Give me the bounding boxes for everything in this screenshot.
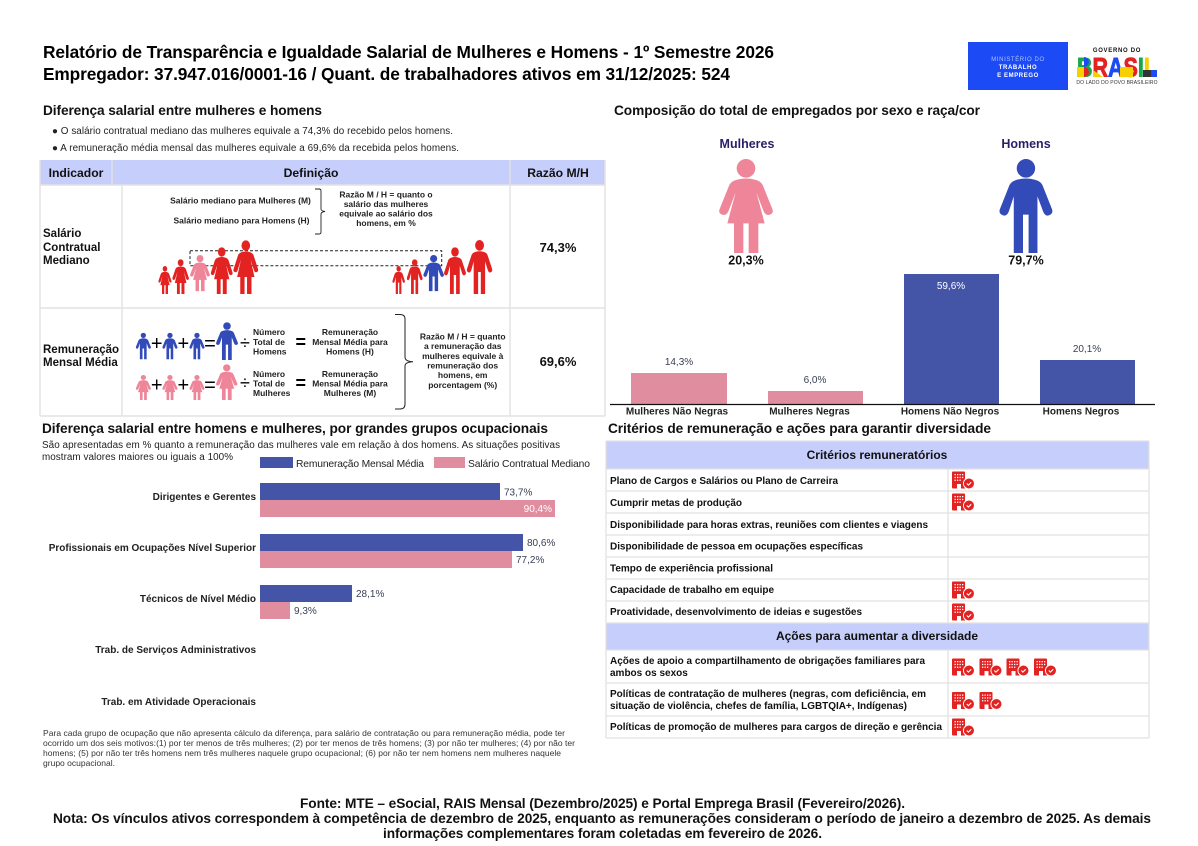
ratio: 69,6%: 69,6% [540,354,577,369]
logo: Ministério do Trabalho e Emprego [968,42,1068,90]
panel: occupational groups [42,421,590,768]
definition: average pay ratio: homens, em [438,370,488,380]
definition: median salary labels: salário das mulheres [344,199,429,209]
row label: Salário Contratual Mediano: Salário [43,228,81,240]
heading: occupational groups: Diferença salarial entre homens e mulheres, por grandes grupos ocupacionais [42,421,548,436]
chart: Técnicos [140,585,384,619]
criteria rows: Capacidade de trabalho em equipe [610,585,774,596]
footnote: Para cada grupo de ocupação que não apresenta cálculo da diferença, para salário de contratação ou para remuneração média, pode ter [43,728,565,738]
criteria rows: Cumprir metas de produção [610,498,742,509]
formula: men average: Homens [253,346,287,356]
bar chart: sex and race: 59,6% [937,281,965,292]
chart: Técnicos: 28,1% [356,589,384,600]
formula: women average: Mensal Média para [312,378,388,388]
criteria table [606,441,1149,738]
chart: Dirigentes e Gerentes [153,483,555,517]
definition: median salary labels: Salário mediano para Homens (H) [173,216,310,226]
footnote: homens; (5) por não ter três homens nem três mulheres naquele grupo ocupacional; (6) por não ter nem homens nem mulheres naquele [43,748,561,758]
formula: men average: = [204,333,216,355]
chart: Profissionais: 80,6% [527,538,555,549]
formula: men average: Remuneração [322,327,378,337]
indicator table [40,160,605,416]
dashed median connector [190,251,442,266]
action icons [952,658,1057,736]
logo: Ministério do Trabalho e Emprego: TRABALHO [999,65,1037,71]
formula: women average: Número [253,369,285,379]
criteria rows: Disponibilidade para horas extras, reuniões com clientes e viagens [610,520,928,531]
chart: Técnicos: Técnicos de Nível Médio [140,594,256,605]
subtitle [42,440,560,463]
criteria rows: Proatividade, desenvolvimento de ideias e sugestões [610,607,862,618]
criteria icons [952,472,975,621]
bar chart: sex and race: Homens Não Negros [901,406,1000,418]
bullet texts [52,126,459,154]
legend [260,457,590,470]
chart: Profissionais: Profissionais em Ocupações Nível Superior [49,543,256,554]
table header: Razão M/H [527,166,589,180]
row label: Salário Contratual Mediano: Mediano [43,255,90,267]
heading: salary difference: Diferença salarial entre mulheres e homens [43,103,322,118]
bar chart: sex and race: 6,0% [804,375,827,386]
row label: Remuneração Mensal Média: Remuneração [43,344,119,356]
bar chart: sex and race: Homens Negros [1043,406,1120,418]
bar chart: sex and race: 20,1% [1073,344,1101,355]
icon: women 20,3% [719,137,774,268]
action rows: Ações de apoio a compartilhamento de obrigações familiares para [610,656,925,667]
action rows: Políticas de promoção de mulheres para cargos de direção e gerência [610,722,942,733]
bullet texts: ● A remuneração média mensal das mulheres equivale a 69,6% da recebida pelos homens. [52,143,459,154]
formula: men average [136,322,388,360]
formula: men average: + [177,333,189,355]
chart: Dirigentes e Gerentes: 90,4% [524,504,552,515]
action rows [610,656,942,733]
legend: Salário Contratual Mediano [468,459,590,470]
formula: women average: Total de [253,378,285,388]
panel: workforce composition [610,103,1155,418]
formula: women average: = [295,373,306,393]
row label: Salário Contratual Mediano: Contratual [43,242,100,254]
icon: women 20,3%: Mulheres [720,137,774,151]
heading: composition: Composição do total de empregados por sexo e raça/cor [614,103,981,118]
table section: Ações para aumentar a diversidade: Ações para aumentar a diversidade [776,629,978,643]
formula: men average: ÷ [240,333,250,353]
action rows: situação de violência, chefes de família, LGBTQIA+, Indígenas) [610,701,907,712]
definition: average pay ratio: Razão M / H = quanto [420,332,506,342]
criteria rows: Plano de Cargos e Salários ou Plano de Carreira [610,476,838,487]
chart: empty categories: Trab. em Atividade Operacionais [101,697,256,708]
bar chart: sex and race: 14,3% [665,357,693,368]
definition: median salary labels: Salário mediano para Mulheres (M) [170,196,311,206]
definition: average pay ratio [395,314,506,409]
formula: men average: Homens (H) [326,346,374,356]
logo: Governo do Brasil: GOVERNO DO [1093,48,1141,54]
formula: men average: Número [253,327,285,337]
bar chart: sex and race: Mulheres Negras [769,406,850,418]
icon: men 79,7%: 79,7% [1008,254,1044,268]
footnote: ocorrido um dos seis motivos:(1) por ter menos de três mulheres; (2) por ter menos de três homens; (3) por não ter mulheres; (4) por não ter [43,738,575,748]
footer note: Fonte: MTE – eSocial, RAIS Mensal (Dezembro/2025) e Portal Emprega Brasil (Fevereiro/2026). [300,796,905,811]
formula: women average [136,364,388,400]
logo: Ministério do Trabalho e Emprego: E EMPREGO [997,73,1039,79]
action rows: ambos os sexos [610,668,688,679]
criteria rows [610,476,928,618]
legend: Remuneração Mensal Média [296,459,424,470]
chart: Profissionais: 77,2% [516,555,544,566]
formula: women average: Mulheres (M) [324,388,376,398]
chart: Dirigentes e Gerentes: 73,7% [504,488,532,498]
footer note: Nota: Os vínculos ativos correspondem à competência de dezembro de 2025, enquanto as remunerações consideram o período de janeiro a dezembro de 2025. As demais [53,811,1151,826]
icon: women 20,3%: 20,3% [728,254,764,268]
bar chart: sex and race [610,274,1155,418]
footer note: informações complementares foram coletadas em fevereiro de 2026. [383,826,822,841]
definition: median salary labels: equivale ao salário dos [339,208,433,218]
table header: Definição [284,166,338,180]
definition: median salary labels [170,189,433,234]
formula: women average: Remuneração [322,369,378,379]
row label: Remuneração Mensal Média: Mensal Média [43,357,118,369]
title: Empregador: 37.947.016/0001-16 / Quant. de trabalhadores ativos em 31/12/2025: 524 [43,64,730,84]
panel: criteria and actions [606,421,1149,738]
definition: average pay ratio: remuneração dos [427,360,498,370]
panel: salary difference [40,103,605,416]
formula: women average: + [177,374,189,396]
chart: Dirigentes e Gerentes: Dirigentes e Gerentes [153,492,256,503]
logo: Governo do Brasil: BRASIL [1077,52,1157,82]
formula: women average: = [204,374,216,396]
formula: women average: Mulheres [253,388,291,398]
definition: median salary labels: homens, em % [356,218,416,228]
chart: empty categories [95,645,256,708]
logo: Ministério do Trabalho e Emprego: MINISTÉRIO DO [991,56,1045,63]
table header: Indicador [49,166,104,180]
definition: average pay ratio: mulheres equivale à [422,351,504,361]
title [43,42,774,84]
criteria rows: Disponibilidade de pessoa em ocupações específicas [610,542,863,552]
formula: men average: Total de [253,337,285,347]
footnote [43,728,575,768]
formula: men average: + [151,333,163,355]
chart: empty categories: Trab. de Serviços Administrativos [95,645,256,656]
row label: Remuneração Mensal Média [43,344,119,369]
definition: average pay ratio: porcentagem (%) [428,380,497,390]
formula: women average: ÷ [240,373,250,393]
table section: Critérios remuneratórios: Critérios remuneratórios [807,448,948,462]
action rows: Políticas de contratação de mulheres (negras, com deficiência, em [610,689,926,700]
icons: women line [158,240,258,294]
logo: Governo do Brasil: DO LADO DO POVO BRASILEIRO [1076,80,1158,86]
table header [49,166,589,180]
bar chart: sex and race: Mulheres Não Negras [626,406,729,418]
formula: men average: = [295,332,306,352]
title: Relatório de Transparência e Igualdade Salarial de Mulheres e Homens - 1º Semestre 2026 [43,42,774,62]
subtitle: São apresentadas em % quanto a remuneração das mulheres vale em relação à dos homens. As situações positivas [42,440,560,451]
definition: median salary labels: Razão M / H = quanto o [339,190,433,200]
criteria rows: Tempo de experiência profissional [610,564,773,574]
chart: Profissionais [49,534,555,568]
definition: average pay ratio: a remuneração das [424,341,502,351]
subtitle: mostram valores maiores ou iguais a 100% [42,452,233,463]
formula: women average: + [151,374,163,396]
footnote: grupo ocupacional. [43,758,115,768]
formula: men average: Mensal Média para [312,337,388,347]
heading: criteria: Critérios de remuneração e ações para garantir diversidade [608,421,991,436]
footer note [53,796,1151,841]
icon: men 79,7% [999,137,1052,268]
bullet texts: ● O salário contratual mediano das mulheres equivale a 74,3% do recebido pelos homens. [52,126,453,137]
icons: men line [392,240,492,294]
ratio: 74,3%: 74,3% [540,240,577,255]
row label: Salário Contratual Mediano [43,228,100,267]
icon: men 79,7%: Homens [1001,137,1051,151]
chart: Técnicos: 9,3% [294,606,317,617]
